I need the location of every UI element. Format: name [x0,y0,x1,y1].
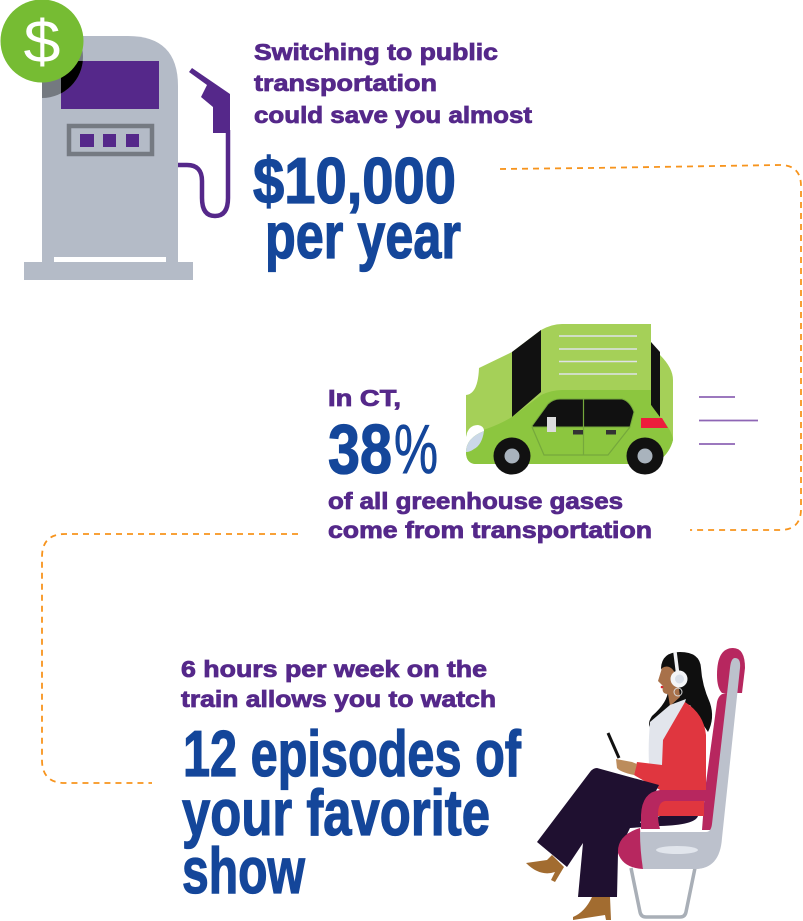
text block: savings: could save you almost [254,102,532,128]
headphones [670,652,688,696]
badge shadow [42,50,83,98]
seat cushion gray [640,832,721,869]
illustration: woman in train seat [526,648,745,920]
face and neck [658,666,680,706]
text block: greenhouse gases: of all greenhouse gases [328,488,623,514]
text block: greenhouse gases: In CT, [328,385,401,411]
white shirt [649,699,686,770]
big number: $10,000: $10,000 [253,144,456,217]
connector: dashed line bottom left [42,534,298,783]
tablet [608,733,619,758]
seat legs [631,868,695,917]
red jacket [634,702,706,790]
dollar badge [0,0,84,82]
car headlight [466,425,484,452]
big statement: 12 episodes of your favorite show [182,717,521,907]
icon: gas pump [0,0,230,280]
text block: savings: transportation [254,70,437,96]
seat headrest [717,648,745,693]
big label: per year: per year [265,199,461,272]
big statement: 12 episodes of your favorite show: your favorite [182,776,490,849]
seat cushion red [618,828,643,869]
armrest [641,790,715,829]
trousers [537,768,698,897]
text block: train episodes [181,656,521,907]
pump screen [61,61,159,109]
pump body [42,36,178,262]
car windows [532,399,634,427]
seat back red [702,693,736,830]
pump base [24,262,193,280]
pump nozzle [189,68,230,133]
jacket hem [658,798,704,816]
text block: greenhouse gases [328,385,652,543]
icon: speed lines [699,397,758,444]
pump hose [178,130,228,216]
icon: green car [466,324,673,474]
car lower body [466,390,673,464]
car tail light [641,418,668,428]
car wheels [494,438,664,474]
dollar badge: $ [24,8,60,75]
car dark pillars [512,330,660,419]
car mirror and handles [547,417,616,434]
text block: savings [253,39,532,272]
car doors [532,399,630,455]
seat frame gray [640,658,740,869]
big statement: 12 episodes of your favorite show: 12 episodes of [183,717,521,790]
text block: greenhouse gases: come from transportation [328,517,652,543]
text block: train episodes: 6 hours per week on the [181,656,487,682]
boots [526,855,611,920]
hand [616,759,637,775]
big number: 38%: 38 [328,410,392,488]
car upper body [466,324,673,464]
text block: savings: Switching to public [254,39,498,65]
big statement: 12 episodes of your favorite show: show [182,834,305,907]
connector: dashed line top right [500,165,801,530]
hair [649,652,712,732]
lips [661,686,663,688]
pump display panel [69,126,152,154]
big number: 38%: % [394,410,438,488]
car stripes [559,336,637,374]
text block: train episodes: train allows you to watch [181,686,496,712]
